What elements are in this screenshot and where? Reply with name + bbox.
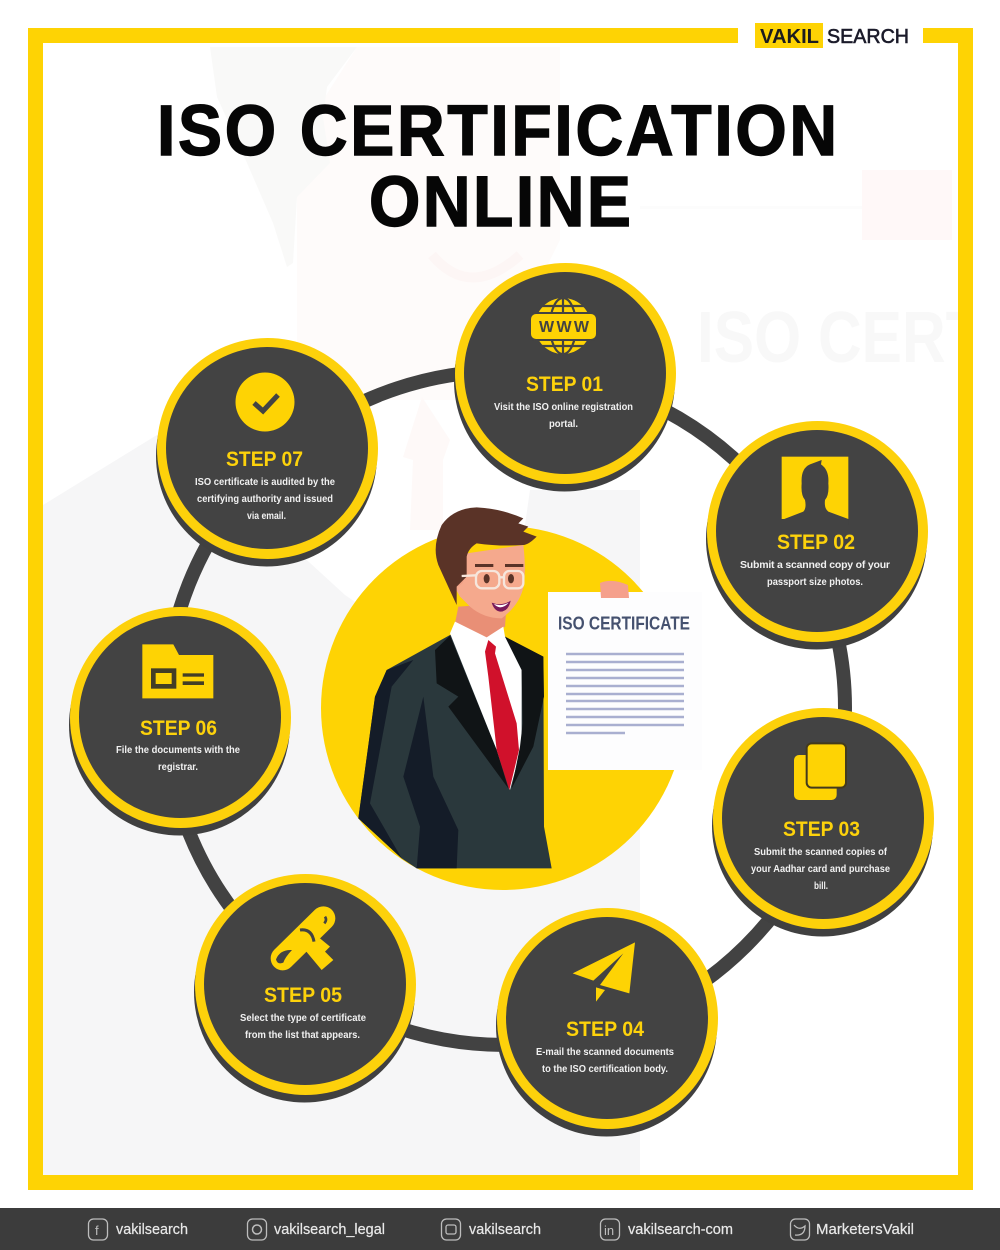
businessman illustration [358,507,552,868]
step 03 panel: Submit the scanned copies of [754,846,887,858]
step 04 panel: STEP 04 [566,1018,644,1041]
step 03 panel: STEP 03 [783,818,860,841]
youtube: vakilsearch [469,1222,541,1238]
central yellow circle [321,526,685,890]
icon: documents [794,743,846,800]
icon: check mark [236,372,294,432]
facebook: vakilsearch [116,1222,188,1238]
step 01 panel [454,263,676,492]
logo [755,23,909,48]
instagram: vakilsearch_legal [274,1222,385,1238]
hand [600,581,629,598]
step 05 panel: STEP 05 [264,984,342,1007]
step 05 panel: from the list that appears. [245,1029,360,1041]
certificate heading: ISO CERTIFICATE [558,614,690,634]
instagram [248,1219,385,1240]
step 05 panel: Select the type of certificate [240,1012,366,1024]
logo: SEARCH [827,26,909,48]
step 07 panel: via email. [247,510,286,522]
face [453,545,525,618]
step 02 panel [706,421,928,650]
facebook [88,1219,188,1240]
step 02 panel: STEP 02 [777,531,855,554]
icon: www globe: WWW [539,319,590,336]
hair [436,507,537,605]
eyes [484,574,490,583]
step 07 panel: certifying authority and issued [197,493,333,505]
linkedin: vakilsearch-com [628,1222,733,1238]
icon: www globe [530,298,597,354]
step 01 panel: STEP 01 [526,373,603,396]
step 03 panel: bill. [814,880,828,892]
icon: folder [142,644,213,698]
icon: passport photo [782,457,848,525]
step 02 panel: Submit a scanned copy of your [740,559,890,571]
faded background illustration: ISO CERT [697,298,983,378]
twitter: MarketersVakil [816,1222,914,1238]
step 01 panel: Visit the ISO online registration [494,401,633,413]
neck [455,603,507,638]
title: ISO CERTIFICATION [157,91,840,171]
step 07 panel [156,338,378,566]
shirt [450,622,522,790]
step 04 panel [496,908,718,1136]
title: ONLINE [369,162,633,242]
step 01 panel: portal. [549,418,578,430]
step 04 panel: E-mail the scanned documents [536,1046,674,1058]
step 06 panel: registrar. [158,761,198,773]
twitter [790,1219,914,1240]
connecting ring [165,371,845,1045]
linkedin [600,1219,733,1240]
step 07 panel: STEP 07 [226,448,303,471]
step 06 panel: File the documents with the [116,744,240,756]
icon: paper plane [573,942,635,1002]
linkedin: in [604,1223,614,1238]
tie [485,640,519,790]
facebook: f [95,1223,99,1238]
step 04 panel: to the ISO certification body. [542,1063,668,1075]
faded background illustration [43,252,640,1175]
certificate lines [566,654,684,733]
glasses [462,571,523,588]
step 06 panel [69,607,291,836]
step 07 panel: ISO certificate is audited by the [195,476,335,488]
lapels [435,636,508,788]
suit [358,635,552,868]
logo: VAKIL [760,26,819,48]
step 03 panel [712,708,934,936]
title [157,91,840,242]
step 06 panel: STEP 06 [140,717,217,740]
step 02 panel: passport size photos. [767,576,863,588]
step 03 panel: your Aadhar card and purchase [751,863,890,875]
mouth [492,601,511,612]
icon: diploma scroll [276,917,333,970]
certificate paper [548,581,702,770]
footer bar [0,1208,1000,1250]
youtube [442,1219,541,1240]
step 05 panel [194,874,416,1102]
